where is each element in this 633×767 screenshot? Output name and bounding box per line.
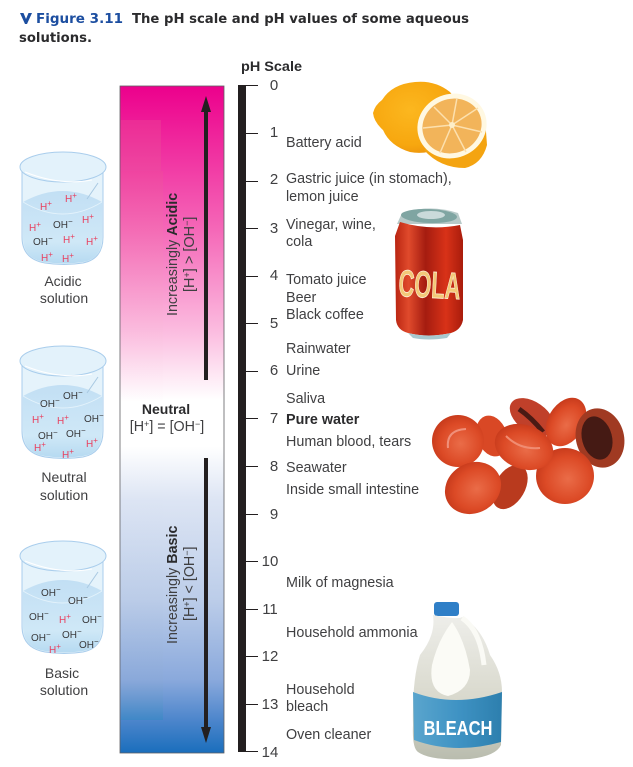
- beaker: neutral: H: [57, 416, 64, 427]
- substance labels: Tomato juice: [286, 272, 367, 288]
- substance labels: Inside small intestine: [286, 482, 419, 498]
- pH scale numbers: 2: [270, 171, 278, 188]
- beaker: basic: OH: [29, 612, 44, 623]
- pH scale numbers: 12: [262, 648, 278, 665]
- beaker: acidic: H: [62, 254, 69, 265]
- beaker: neutral: OH: [63, 391, 78, 402]
- beaker: neutral: H: [62, 450, 69, 461]
- label: neutral: ] = [OH: [149, 419, 195, 435]
- icon: bleach bottle: [413, 602, 502, 759]
- beaker: basic: OH: [79, 640, 94, 651]
- beaker: neutral: +: [69, 447, 74, 456]
- label: acidic concentration: [H: [182, 278, 198, 292]
- pH scale numbers: 11: [262, 601, 278, 618]
- substance labels: cola: [286, 234, 312, 250]
- beaker: acidic: H: [86, 237, 93, 248]
- beaker: acidic: +: [72, 191, 77, 200]
- label: basic solution: [40, 665, 88, 698]
- beaker: neutral: H: [34, 443, 41, 454]
- pH scale numbers: 1: [270, 124, 278, 141]
- beaker: acidic: H: [41, 253, 48, 264]
- label: neutral: [130, 401, 204, 435]
- pH scale ruler: [238, 85, 258, 752]
- substance labels: Rainwater: [286, 341, 351, 357]
- beaker: acidic: +: [89, 212, 94, 221]
- beaker: basic: OH: [62, 630, 77, 641]
- title: [19, 12, 469, 46]
- beaker: acidic: H: [63, 235, 70, 246]
- label: acidic solution: solution: [40, 290, 88, 306]
- beaker: basic: [20, 541, 106, 656]
- beaker: neutral: +: [93, 436, 98, 445]
- substance labels: Milk of magnesia: [286, 575, 394, 591]
- icon: red blood cells: [432, 390, 631, 524]
- pH scale numbers: 13: [262, 696, 278, 713]
- beaker: acidic: +: [36, 220, 41, 229]
- label: neutral: [H: [130, 419, 144, 435]
- substance labels: Oven cleaner: [286, 727, 372, 743]
- beaker: neutral: OH: [40, 399, 55, 410]
- substance labels: Seawater: [286, 460, 347, 476]
- beaker: basic: H: [59, 615, 66, 626]
- beaker: basic: −: [44, 609, 49, 618]
- beaker: basic: +: [56, 642, 61, 651]
- label: basic solution: solution: [40, 682, 88, 698]
- label: acidic solution: [40, 273, 88, 306]
- label: neutral: ]: [200, 419, 204, 435]
- label: basic concentration: ]: [182, 546, 198, 550]
- beaker: neutral: −: [99, 411, 104, 420]
- substance labels: Urine: [286, 363, 320, 379]
- beaker: acidic: +: [47, 199, 52, 208]
- label: basic solution: Basic: [45, 665, 79, 681]
- substance labels: Beer: [286, 290, 317, 306]
- substance labels: Household: [286, 682, 355, 698]
- pH scale numbers: 14: [262, 744, 278, 761]
- arrow: increasingly acidic: [201, 96, 211, 380]
- substance labels: Household ammonia: [286, 625, 418, 641]
- label: acidic concentration: −: [182, 221, 192, 226]
- beaker: acidic: [20, 152, 106, 265]
- beaker: neutral: −: [53, 428, 58, 437]
- pH scale numbers: 4: [270, 267, 278, 284]
- pH scale numbers: 9: [270, 506, 278, 523]
- beaker: basic: OH: [31, 633, 46, 644]
- beaker: basic: +: [66, 612, 71, 621]
- label: basic concentration: +: [182, 601, 192, 607]
- beaker: acidic: −: [68, 217, 73, 226]
- label: acidic concentration: ]: [182, 217, 198, 221]
- substance labels: Saliva: [286, 391, 325, 407]
- label: neutral: +: [144, 419, 149, 429]
- pH scale numbers: 0: [270, 77, 278, 94]
- heading: pH scale: pH Scale: [241, 58, 302, 74]
- beaker: basic: −: [56, 585, 61, 594]
- beaker: acidic: H: [29, 223, 36, 234]
- beaker: basic: −: [97, 612, 102, 621]
- beaker: neutral: +: [39, 412, 44, 421]
- beaker: neutral: OH: [84, 414, 99, 425]
- beaker: neutral: −: [81, 426, 86, 435]
- icon: bleach bottle: BLEACH: [424, 718, 492, 740]
- substance labels: Gastric juice (in stomach),: [286, 171, 452, 187]
- label: acidic concentration: +: [182, 272, 192, 278]
- label: neutral solution: Neutral: [41, 469, 87, 485]
- beaker: basic: H: [49, 645, 56, 656]
- beaker: basic: −: [83, 593, 88, 602]
- beaker: acidic: OH: [33, 237, 48, 248]
- beaker: acidic: H: [82, 215, 89, 226]
- beaker: acidic: OH: [53, 220, 68, 231]
- beaker: acidic: +: [48, 250, 53, 259]
- beaker: basic: −: [94, 637, 99, 646]
- beaker: neutral: [20, 346, 106, 461]
- substance labels: Pure water: [286, 412, 360, 428]
- title: solutions.: [19, 31, 92, 46]
- label: neutral: −: [195, 419, 200, 429]
- beaker: basic: −: [77, 627, 82, 636]
- pH scale numbers: 3: [270, 220, 278, 237]
- pH scale numbers: 7: [270, 410, 278, 427]
- gradient pH bar: [120, 86, 224, 753]
- icon: cola can: [395, 208, 463, 340]
- substance labels: Battery acid: [286, 135, 362, 151]
- title: Figure 3.11: [36, 12, 123, 27]
- pH scale numbers: 10: [262, 553, 278, 570]
- beaker: neutral: H: [32, 415, 39, 426]
- beaker: basic: OH: [41, 588, 56, 599]
- beaker: neutral: +: [64, 413, 69, 422]
- substance labels: bleach: [286, 699, 328, 715]
- label: neutral: Neutral: [142, 401, 190, 417]
- label: neutral solution: [40, 469, 88, 503]
- beaker: acidic: +: [93, 234, 98, 243]
- label: increasingly basic: Increasingly Basic: [165, 526, 181, 644]
- beaker: neutral: −: [55, 396, 60, 405]
- label: acidic concentration: ] > [OH: [182, 226, 198, 272]
- substance labels: Vinegar, wine,: [286, 217, 376, 233]
- label: basic concentration: −: [182, 550, 192, 556]
- arrow: increasingly basic: [201, 458, 211, 743]
- label: acidic solution: Acidic: [44, 273, 82, 289]
- beaker: neutral: OH: [66, 429, 81, 440]
- beaker: basic: OH: [68, 596, 83, 607]
- substance labels: lemon juice: [286, 189, 359, 205]
- beaker: acidic: +: [69, 251, 74, 260]
- beaker: neutral: −: [78, 388, 83, 397]
- label: basic concentration: ] < [OH: [182, 556, 198, 601]
- label: neutral solution: solution: [40, 487, 88, 503]
- beaker: basic: OH: [82, 615, 97, 626]
- beaker: neutral: +: [41, 440, 46, 449]
- icon: lemon: [373, 82, 496, 169]
- beaker: acidic: +: [70, 232, 75, 241]
- pH scale numbers: 8: [270, 458, 278, 475]
- title: The pH scale and pH values of some aqueous: [132, 12, 469, 27]
- substance labels: [286, 135, 452, 743]
- beaker: basic: −: [46, 630, 51, 639]
- beaker: acidic: H: [40, 202, 47, 213]
- beaker: neutral: H: [86, 439, 93, 450]
- beaker: neutral: OH: [38, 431, 53, 442]
- pH scale numbers: [262, 77, 278, 761]
- pH scale numbers: 5: [270, 315, 278, 332]
- label: increasingly acidic: Increasingly Acidic: [165, 193, 181, 316]
- substance labels: Black coffee: [286, 307, 364, 323]
- beaker: acidic: −: [48, 234, 53, 243]
- substance labels: Human blood, tears: [286, 434, 411, 450]
- beaker: acidic: H: [65, 194, 72, 205]
- pH scale numbers: 6: [270, 362, 278, 379]
- icon: cola can: COLA: [398, 264, 462, 308]
- label: basic concentration: [H: [182, 607, 198, 621]
